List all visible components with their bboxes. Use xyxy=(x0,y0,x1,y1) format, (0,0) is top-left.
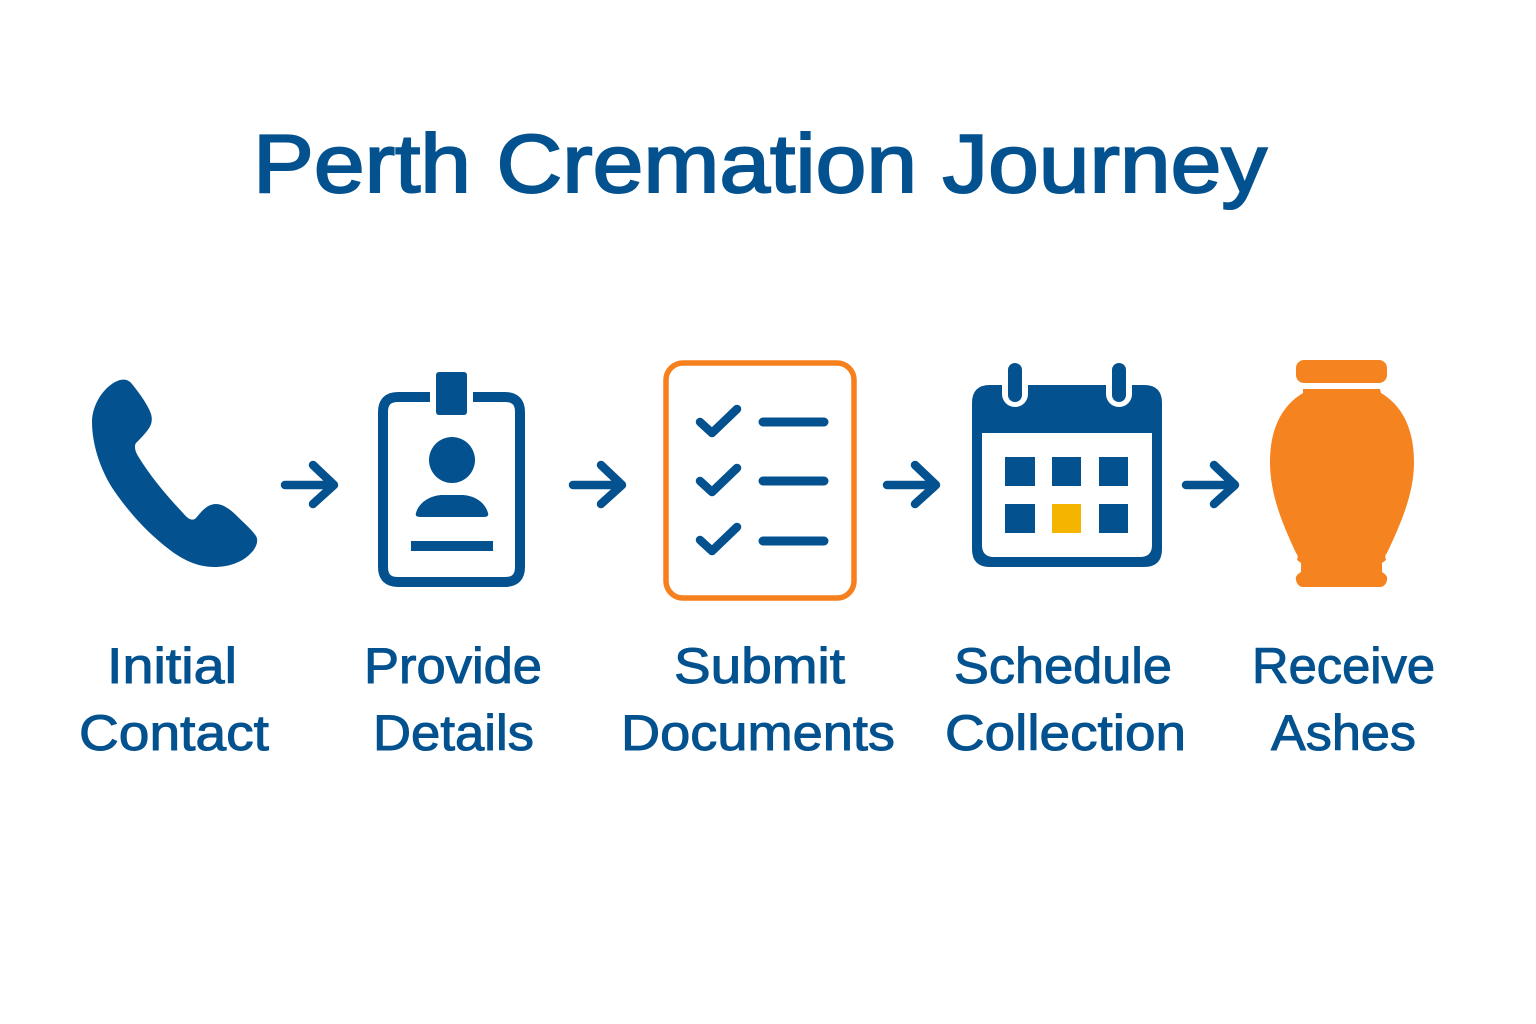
label: schedule collection: Schedule xyxy=(954,638,1172,694)
title: Perth Cremation Journey xyxy=(253,117,1268,210)
label: submit documents: Documents xyxy=(621,705,895,761)
label: receive ashes: Receive xyxy=(1252,638,1435,694)
label: initial contact: Contact xyxy=(79,705,269,761)
calendar rings xyxy=(1002,363,1132,407)
icon: urn xyxy=(1270,360,1414,587)
label: provide details: Provide xyxy=(364,638,542,694)
checklist frame xyxy=(666,363,854,598)
arrow: documents to schedule xyxy=(887,465,936,504)
calendar day squares xyxy=(1005,457,1128,533)
badge person body xyxy=(416,495,488,517)
arrow: schedule to ashes xyxy=(1186,465,1235,504)
calendar page xyxy=(982,433,1152,557)
calendar body xyxy=(972,385,1162,567)
label: provide details: Details xyxy=(373,705,534,761)
label: submit documents xyxy=(621,638,895,761)
icon: ID badge xyxy=(383,372,520,582)
label: schedule collection xyxy=(945,638,1186,761)
icon: phone xyxy=(92,380,257,567)
urn body xyxy=(1270,389,1414,587)
label: initial contact: Initial xyxy=(107,638,237,694)
icon: checklist xyxy=(666,363,854,598)
arrow: details to documents xyxy=(573,465,622,504)
label: provide details xyxy=(364,638,542,761)
label: schedule collection: Collection xyxy=(945,705,1186,761)
label: receive ashes: Ashes xyxy=(1271,705,1416,761)
urn lid xyxy=(1296,360,1387,383)
badge outline xyxy=(383,397,520,582)
arrow: contact to details xyxy=(285,465,334,504)
label: submit documents: Submit xyxy=(674,638,845,694)
badge person head xyxy=(429,437,475,483)
label: receive ashes xyxy=(1252,638,1435,761)
label: initial contact xyxy=(79,638,269,761)
badge clip xyxy=(436,372,467,415)
icon: calendar xyxy=(972,363,1162,567)
checklist rows xyxy=(700,409,824,551)
badge text line xyxy=(411,541,493,551)
